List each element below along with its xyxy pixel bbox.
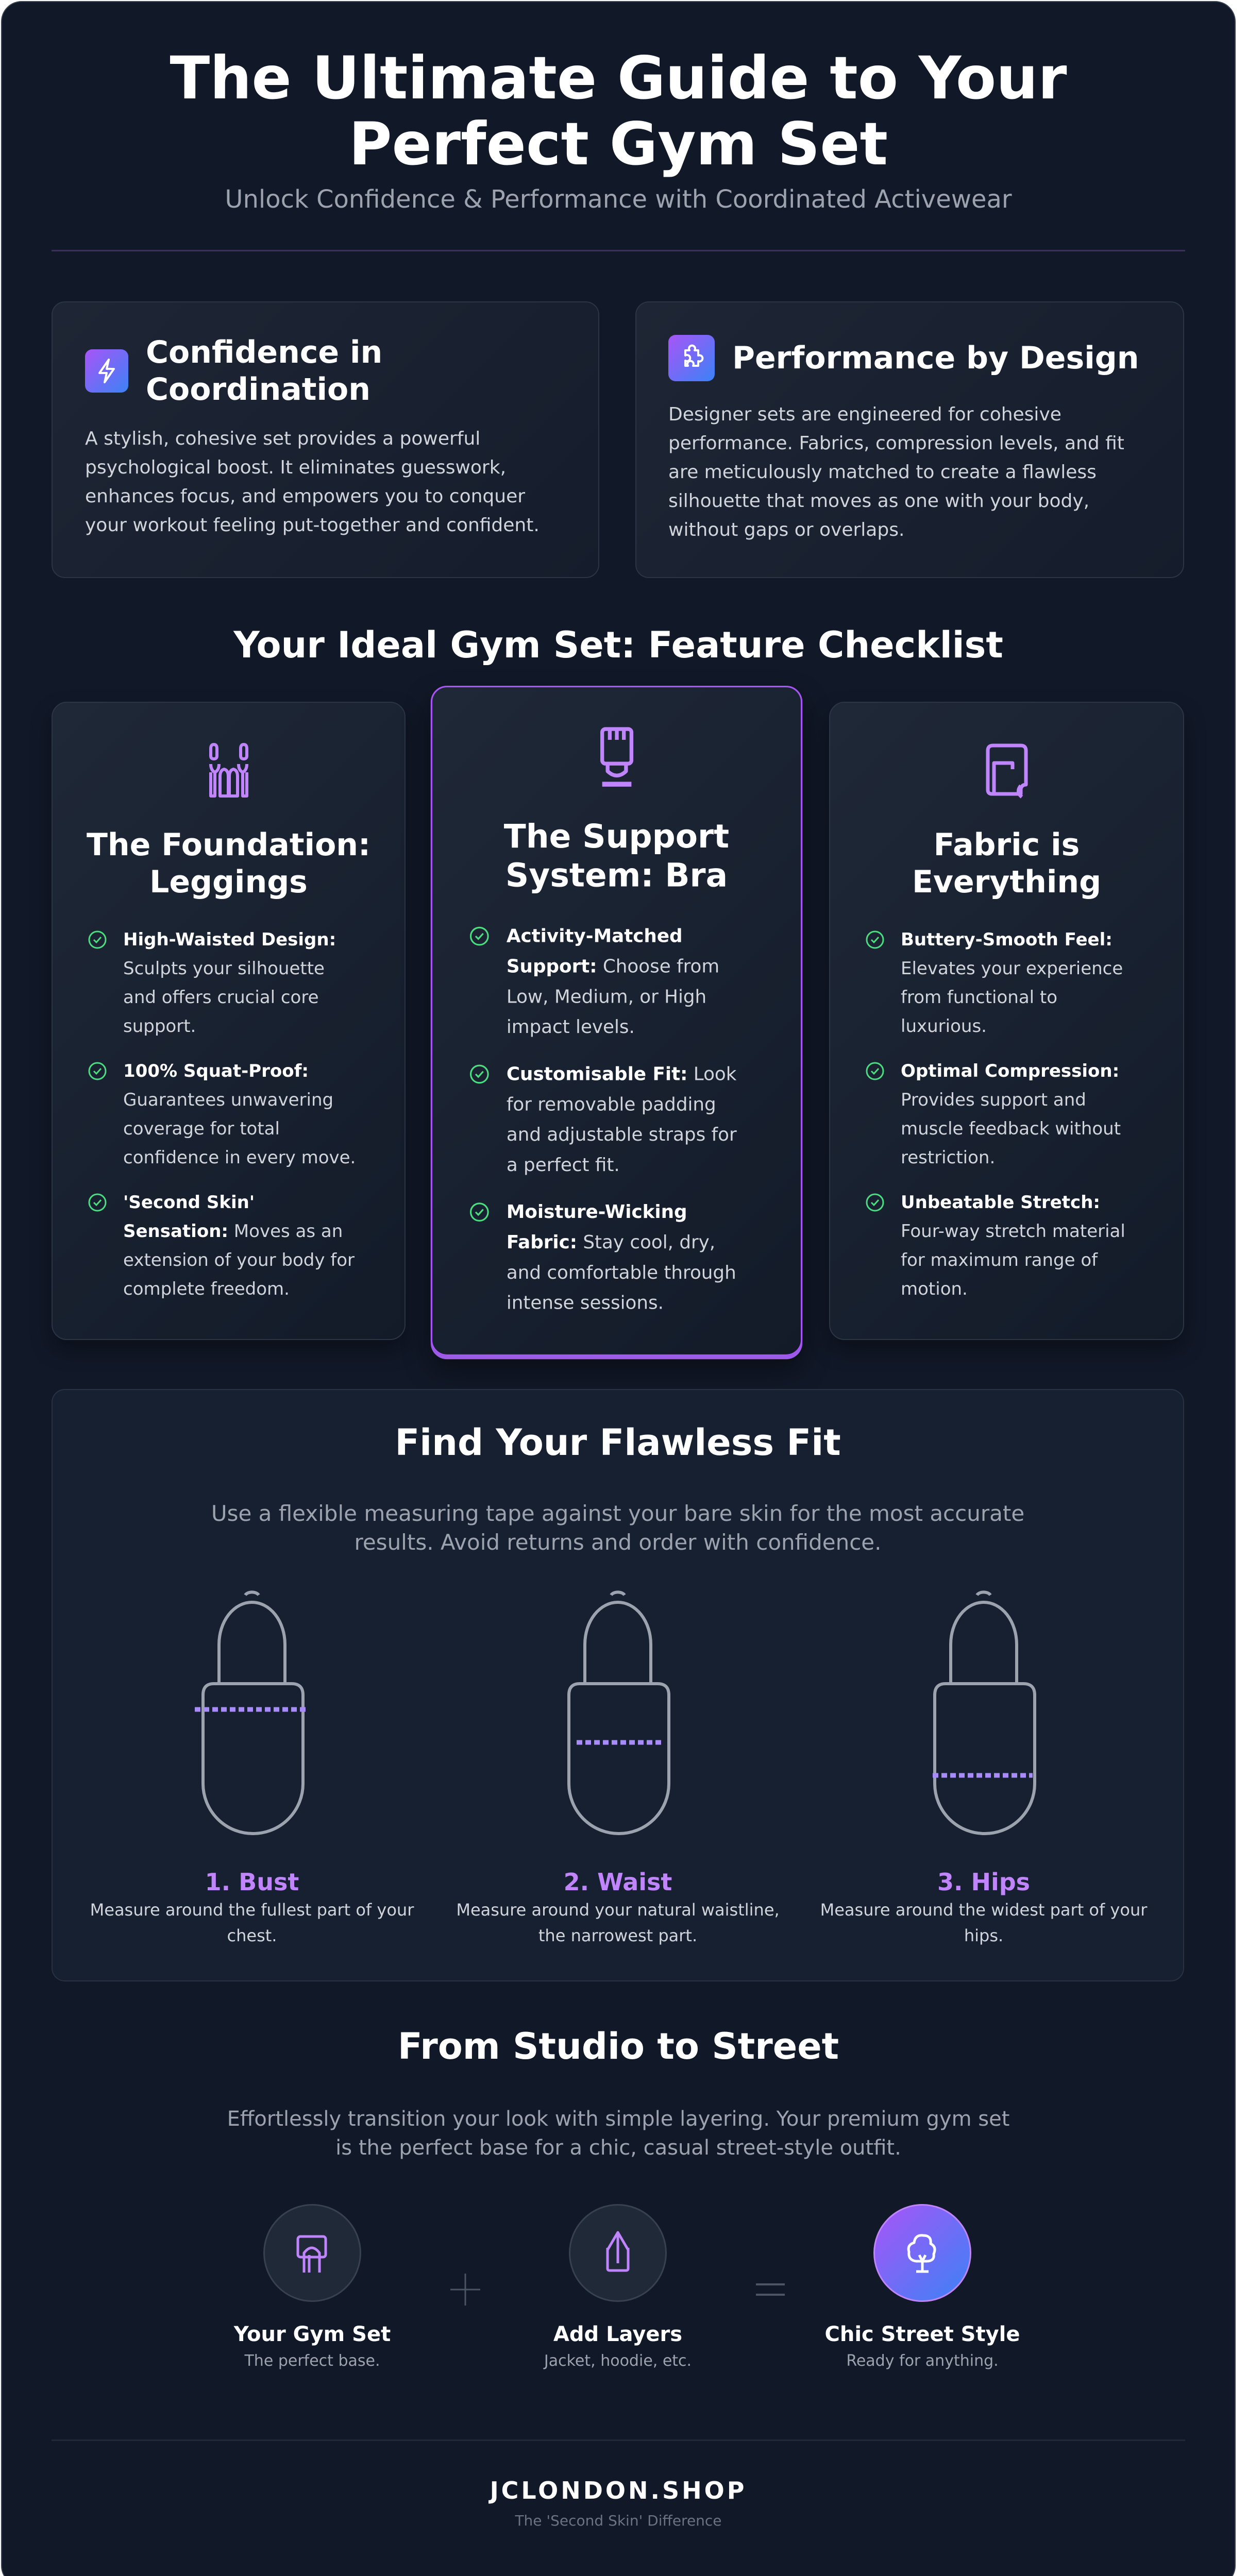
figures: body outlines xyxy=(195,1590,1036,1835)
label: chic street style xyxy=(794,2322,1051,2371)
body text xyxy=(85,428,540,536)
footer tagline: The 'Second Skin' Difference xyxy=(515,2512,722,2529)
checklist xyxy=(866,929,1125,1299)
heading: Leggings xyxy=(149,864,308,900)
checklist: complete freedom. xyxy=(123,1279,290,1299)
heading xyxy=(504,818,729,894)
label: hips: hips. xyxy=(964,1926,1003,1945)
checklist: and comfortable through xyxy=(507,1262,736,1283)
label: your gym set xyxy=(233,2323,391,2370)
checklist: a perfect fit. xyxy=(507,1154,620,1176)
checklist: confidence in every move. xyxy=(123,1147,356,1168)
body text: your workout feeling put-together and confident. xyxy=(85,515,540,536)
intro text xyxy=(227,2107,1009,2160)
label: your gym set: Your Gym Set xyxy=(234,2323,391,2346)
label: add layers xyxy=(543,2323,692,2370)
checklist: High-Waisted Design: xyxy=(123,929,336,950)
checklist: coverage for total xyxy=(123,1118,280,1139)
panel: performance by design xyxy=(635,301,1184,578)
checklist: for removable padding xyxy=(507,1094,716,1115)
title: Perfect Gym Set xyxy=(349,110,888,178)
checklist: extension of your body for xyxy=(123,1250,355,1270)
checklist: 100% Squat-Proof: xyxy=(123,1061,309,1081)
body text: psychological boost. It eliminates guesswork, xyxy=(85,457,506,478)
label: waist: 2. Waist xyxy=(564,1868,672,1896)
checklist: Customisable Fit: Look xyxy=(507,1063,736,1085)
checklist: muscle feedback without xyxy=(901,1118,1121,1139)
figure: hips xyxy=(933,1592,1035,1834)
label: waist: the narrowest part. xyxy=(538,1926,697,1945)
checklist: Sculpts your silhouette xyxy=(123,958,325,979)
figure: bust xyxy=(195,1592,307,1834)
panel: bra (featured) xyxy=(431,686,802,1356)
checklist: for maximum range of xyxy=(901,1250,1098,1270)
checklist: and offers crucial core xyxy=(123,987,319,1008)
icon: street style circle xyxy=(873,2204,971,2302)
title: The Ultimate Guide to Your xyxy=(170,44,1067,112)
checklist: Unbeatable Stretch: xyxy=(901,1192,1100,1213)
checklist: support. xyxy=(123,1016,196,1037)
footer brand: JCLONDON.SHOP xyxy=(490,2477,747,2504)
checklist: 'Second Skin' xyxy=(123,1192,255,1213)
icon: bra xyxy=(600,727,634,787)
heading xyxy=(912,827,1101,900)
checklist: Buttery-Smooth Feel: xyxy=(901,929,1113,950)
heading: Everything xyxy=(912,864,1101,900)
intro text: is the perfect base for a chic, casual street-style outfit. xyxy=(335,2136,901,2160)
intro text xyxy=(211,1501,1024,1555)
panel: leggings xyxy=(52,702,406,1340)
checklist: Fabric: Stay cool, dry, xyxy=(507,1231,715,1253)
label: bust: chest. xyxy=(227,1926,277,1945)
checklist: and adjustable straps for xyxy=(507,1124,737,1146)
figure: waist xyxy=(569,1592,669,1834)
intro text: Effortlessly transition your look with simple layering. Your premium gym set xyxy=(227,2107,1009,2131)
checklist: Activity-Matched xyxy=(507,925,683,947)
checklist: luxurious. xyxy=(901,1016,987,1037)
checklist: Sensation: Moves as an xyxy=(123,1221,343,1242)
subtitle: Unlock Confidence & Performance with Coordinated Activewear xyxy=(225,185,1012,214)
icon: leggings xyxy=(209,743,248,798)
label: waist xyxy=(456,1868,780,1945)
heading: System: Bra xyxy=(505,857,728,894)
heading: Confidence in xyxy=(146,334,382,370)
checklist: Guarantees unwavering xyxy=(123,1090,333,1110)
label: hips: 3. Hips xyxy=(937,1868,1030,1896)
body text: without gaps or overlaps. xyxy=(668,519,904,540)
checklist: Optimal Compression: xyxy=(901,1061,1119,1081)
icon: puzzle xyxy=(668,335,715,381)
title xyxy=(170,44,1067,178)
label: chic street style: Chic Street Style xyxy=(824,2323,1020,2346)
heading xyxy=(146,334,382,408)
icon: equals xyxy=(756,2283,785,2296)
heading: The Support xyxy=(504,818,729,856)
heading: Coordination xyxy=(146,371,370,408)
checklist xyxy=(89,929,356,1299)
checklist: Elevates your experience xyxy=(901,958,1123,979)
checklist: intense sessions. xyxy=(507,1292,664,1314)
label: hips xyxy=(820,1868,1147,1945)
panel: find your flawless fit xyxy=(52,1389,1184,1981)
body text: silhouette that moves as one with your body, xyxy=(668,490,1089,512)
icon: gym set circle xyxy=(263,2204,361,2302)
heading: feature checklist: Your Ideal Gym Set: Feature Checklist xyxy=(233,624,1003,666)
checklist: Support: Choose from xyxy=(507,956,719,977)
label: add layers: Jacket, hoodie, etc. xyxy=(544,2352,692,2370)
panel: fabric xyxy=(829,702,1184,1340)
icon: fabric xyxy=(986,744,1027,799)
intro text: results. Avoid returns and order with confidence. xyxy=(355,1530,881,1555)
heading: Fabric is xyxy=(934,827,1080,863)
checklist: motion. xyxy=(901,1279,968,1299)
label: bust: 1. Bust xyxy=(205,1868,299,1896)
checklist: Low, Medium, or High xyxy=(507,986,706,1008)
label: hips: Measure around the widest part of your xyxy=(820,1900,1147,1920)
heading xyxy=(87,827,370,900)
icon: add layers circle xyxy=(569,2204,667,2302)
label: add layers: Add Layers xyxy=(553,2323,682,2346)
checklist xyxy=(470,925,737,1314)
body text: performance. Fabrics, compression levels, and fit xyxy=(668,433,1124,454)
checklist: restriction. xyxy=(901,1147,995,1168)
heading: The Foundation: xyxy=(87,827,370,863)
label: bust: Measure around the fullest part of your xyxy=(90,1900,414,1920)
checklist: impact levels. xyxy=(507,1016,635,1038)
checklist: Four-way stretch material xyxy=(901,1221,1125,1242)
checklist: Provides support and xyxy=(901,1090,1086,1110)
heading: Find Your Flawless Fit xyxy=(395,1421,841,1464)
body text xyxy=(668,404,1124,540)
icon: lightning xyxy=(85,349,128,393)
heading: studio to street: From Studio to Street xyxy=(398,2025,839,2067)
heading: Performance by Design xyxy=(732,340,1139,376)
icon: plus xyxy=(450,2274,480,2306)
checklist: from functional to xyxy=(901,987,1057,1008)
label: your gym set: The perfect base. xyxy=(244,2352,380,2370)
label: chic street style: Ready for anything. xyxy=(846,2352,999,2370)
label: waist: Measure around your natural waistline, xyxy=(456,1900,780,1920)
checklist: Moisture-Wicking xyxy=(507,1201,687,1223)
body text: A stylish, cohesive set provides a powerful xyxy=(85,428,480,449)
body text: are meticulously matched to create a flawless xyxy=(668,462,1097,483)
body text: enhances focus, and empowers you to conquer xyxy=(85,486,525,507)
panel: confidence in coordination xyxy=(52,301,599,578)
intro text: Use a flexible measuring tape against your bare skin for the most accurate xyxy=(211,1501,1024,1526)
body text: Designer sets are engineered for cohesive xyxy=(668,404,1061,425)
label: bust xyxy=(90,1868,414,1945)
